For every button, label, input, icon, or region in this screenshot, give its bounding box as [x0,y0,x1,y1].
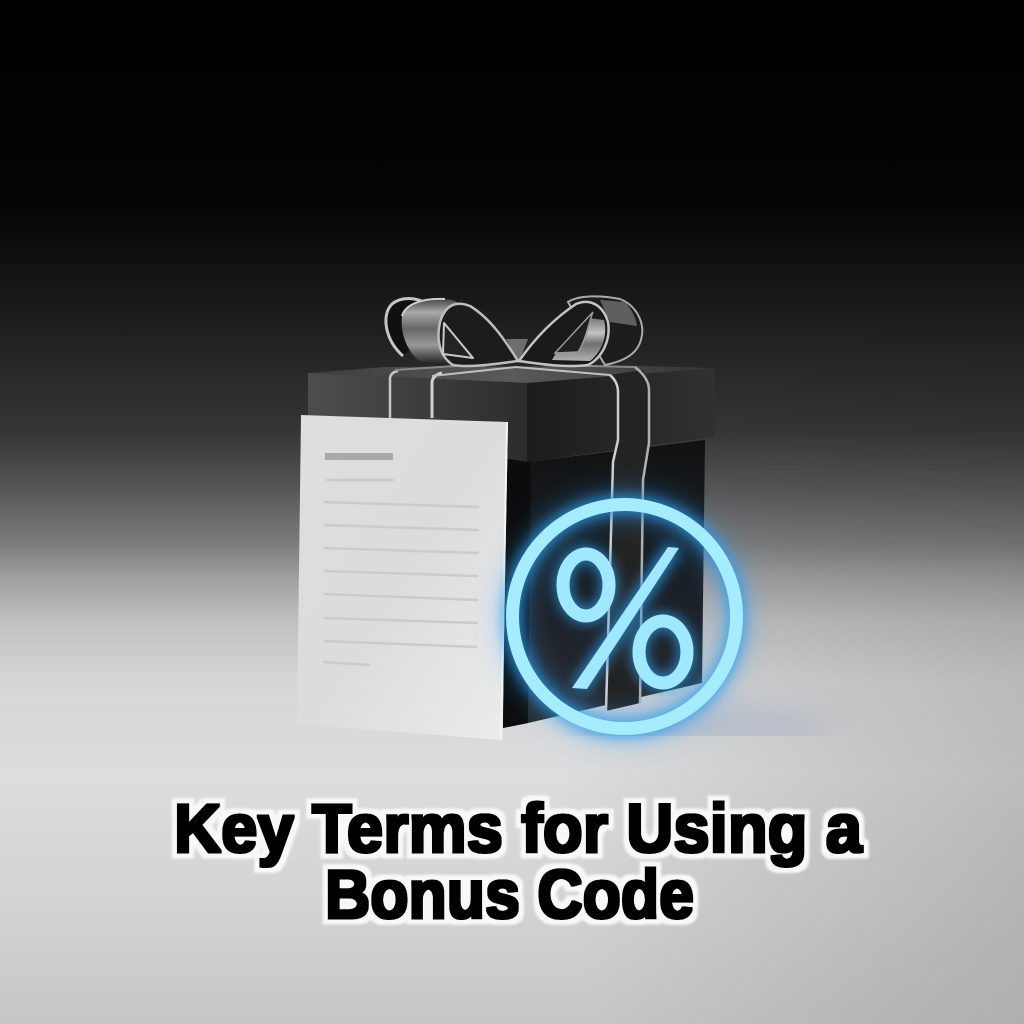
left back loop [386,298,430,356]
document heading line [325,453,393,460]
glowing percent badge [512,504,736,728]
badge glow [512,504,736,728]
gift box [308,296,715,728]
document sheet [297,415,508,740]
centre knot [506,339,528,362]
right back loop sheen [600,300,637,326]
right loop opening [555,312,593,353]
box lid [308,366,715,462]
badge ring [512,504,736,728]
right inner silver [552,318,605,361]
box body [503,440,705,728]
left front loop [439,304,518,366]
title second line: Bonus Code [325,856,694,933]
ribbon straps [390,365,649,711]
document text lines [323,480,479,665]
infographic canvas [0,219,1024,1024]
floor shadow [579,700,819,736]
percent sign [563,547,687,689]
ribbon bow [386,296,642,366]
right back loop [568,296,642,365]
badge wide glow [512,504,736,728]
left silver band [402,299,458,365]
title: Key Terms for Using a [174,790,863,867]
right front loop [519,302,609,366]
